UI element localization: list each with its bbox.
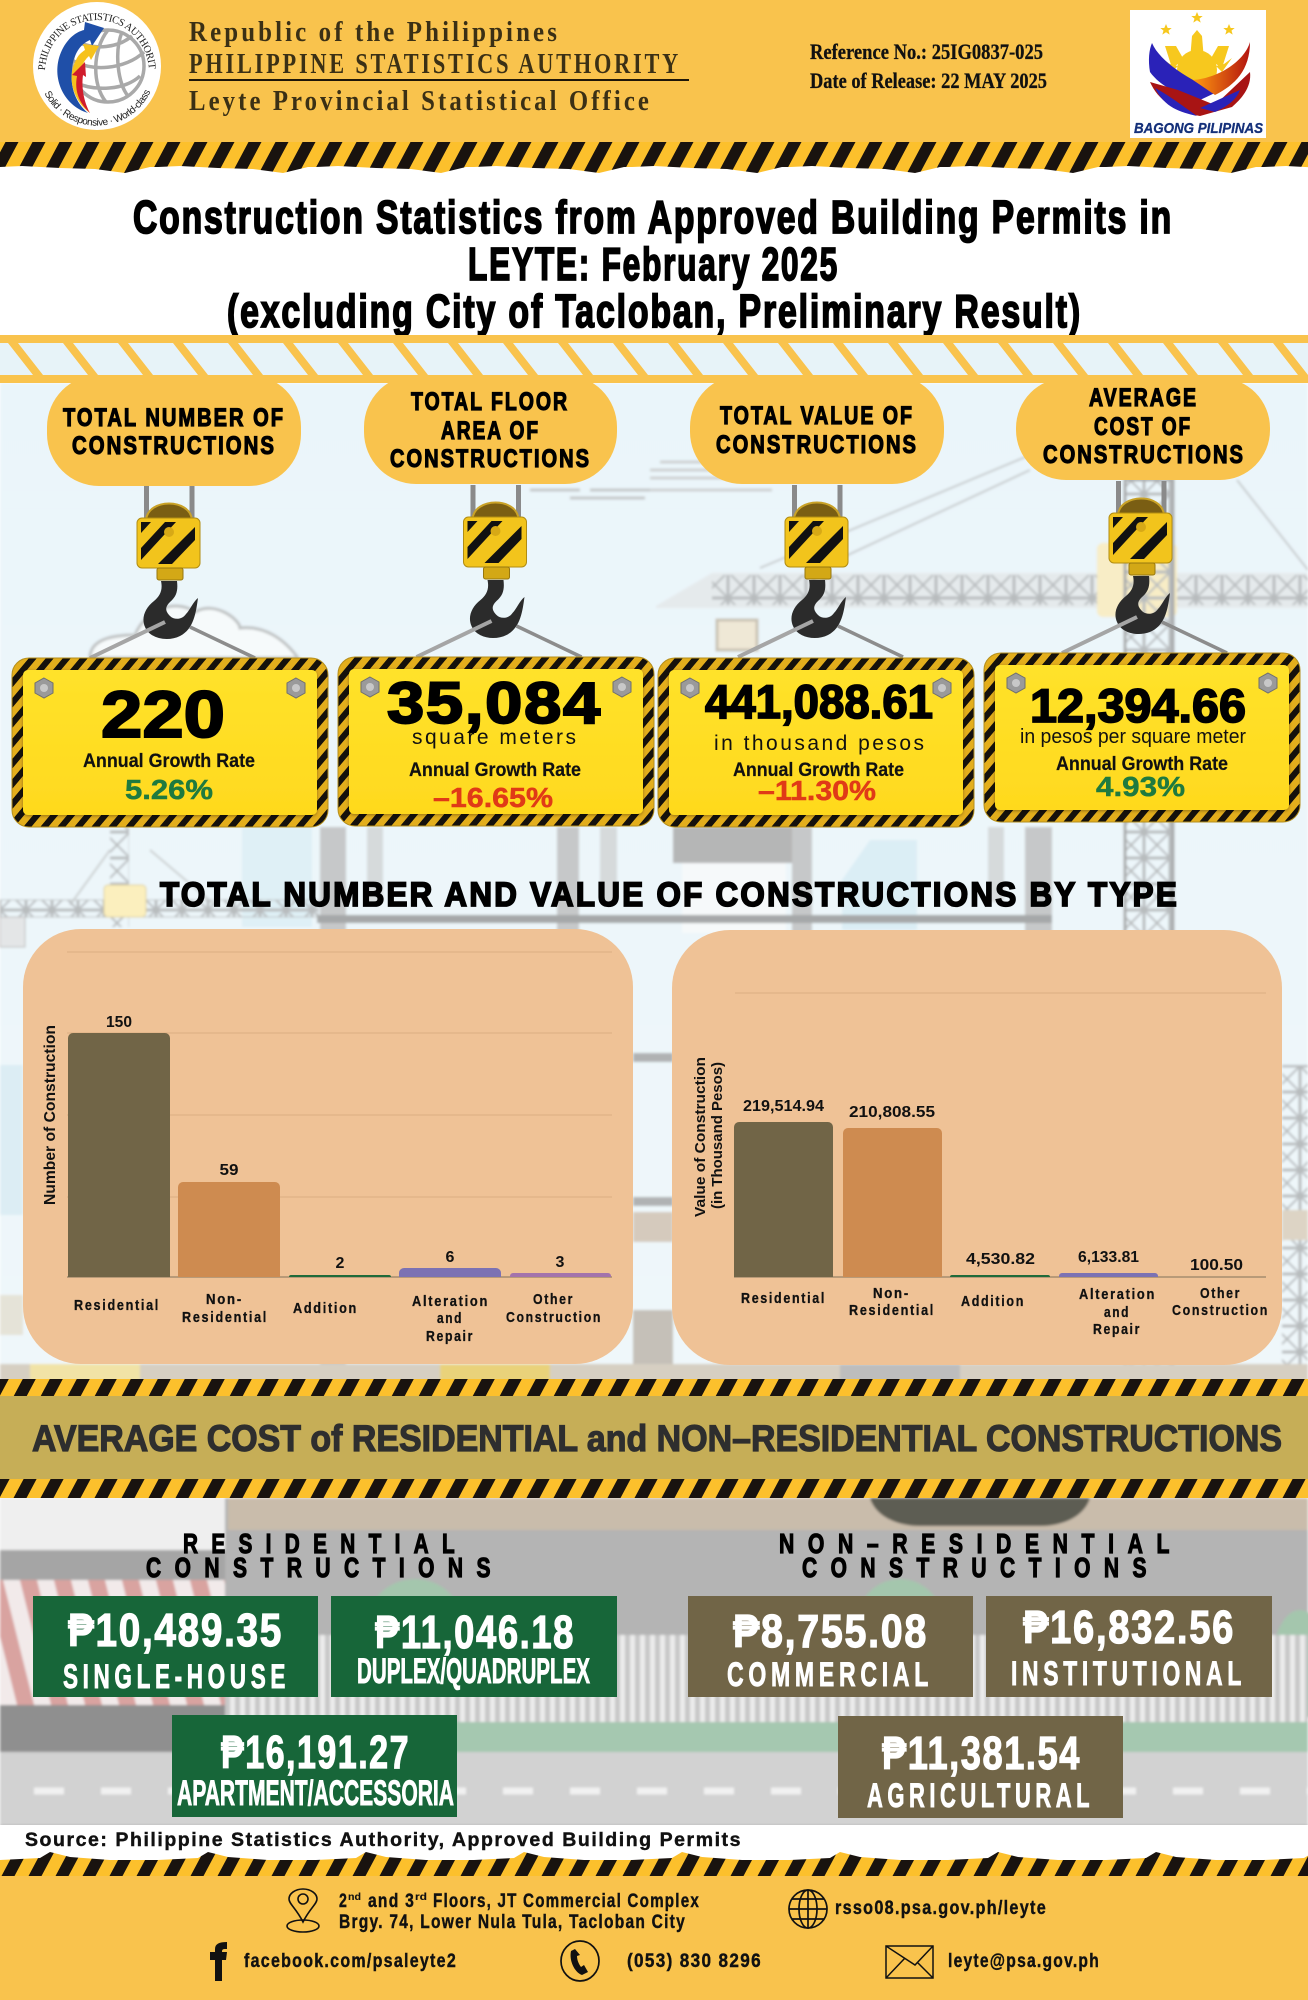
title band: LEYTE: February 2025	[468, 238, 839, 290]
card: apartment/accessoria: ₱16,191.27	[221, 1726, 410, 1778]
category labels: Non-	[873, 1285, 910, 1302]
heading: residential constructions	[146, 1528, 504, 1583]
category labels: Other	[1200, 1285, 1241, 1302]
bars	[734, 1122, 1158, 1277]
address	[339, 1891, 700, 1933]
pill labels: TOTAL NUMBER OF	[63, 404, 285, 432]
pill labels	[63, 384, 1245, 473]
category labels	[741, 1285, 1269, 1338]
pill labels: AREA OF	[441, 417, 540, 445]
agency name	[189, 17, 689, 117]
card: single-house: ₱10,489.35	[68, 1604, 283, 1656]
sign: total number of constructions: 5.26%	[125, 774, 213, 805]
pill labels: TOTAL FLOOR	[411, 388, 569, 416]
card: commercial: ₱8,755.08	[733, 1605, 928, 1657]
value labels: 6,133.81	[1078, 1249, 1139, 1266]
category labels: Addition	[961, 1293, 1025, 1310]
category labels: Residential	[741, 1290, 826, 1307]
value labels: 219,514.94	[743, 1098, 824, 1115]
category labels: Other	[533, 1291, 574, 1308]
axis title: Value of Construction	[692, 1057, 709, 1217]
footer contact band	[0, 1876, 1308, 2000]
card: single-house: SINGLE-HOUSE	[63, 1658, 290, 1696]
header band	[0, 0, 1308, 142]
reference number and release date: Date of Release: 22 MAY 2025	[810, 68, 1047, 93]
agency name: Republic of the Philippines	[189, 17, 560, 48]
heading: non-residential constructions: NON–RESIDENTIAL	[779, 1528, 1183, 1559]
hazard stripe: bottom torn	[0, 1851, 1308, 1877]
category labels: Construction	[506, 1309, 602, 1326]
heading: non-residential constructions	[779, 1528, 1183, 1583]
source note	[0, 1825, 1308, 1855]
panel: number of construction bar chart	[23, 929, 633, 1364]
hazard stripe: top torn	[0, 142, 1308, 176]
category labels: Residential	[182, 1309, 268, 1326]
sign: total value: in thousand pesos	[714, 732, 924, 755]
pill labels: TOTAL VALUE OF	[720, 402, 914, 430]
value labels: 4,530.82	[966, 1251, 1035, 1268]
category labels	[74, 1291, 602, 1345]
value labels: 6	[446, 1249, 455, 1266]
address: Brgy. 74, Lower Nula Tula, Tacloban City	[339, 1912, 686, 1933]
category labels: and	[1104, 1304, 1130, 1321]
sign: total number of constructions: Annual Growth Rate	[83, 750, 255, 772]
category labels: Residential	[849, 1302, 935, 1319]
sign: average cost: Annual Growth Rate	[1056, 753, 1228, 775]
sign: total number of constructions: 220	[101, 677, 225, 751]
card: duplex/quadruplex: DUPLEX/QUADRUPLEX	[357, 1652, 590, 1691]
card: commercial	[688, 1596, 973, 1697]
card: single-house	[33, 1596, 318, 1697]
axis title: Number of Construction	[42, 1025, 59, 1205]
source note: Source: Philippine Statistics Authority, Approved Building Permits	[25, 1830, 742, 1851]
pills: metric titles	[47, 375, 1270, 486]
sign: total floor area: square meters	[412, 726, 576, 749]
category labels: and	[437, 1310, 463, 1327]
striped banner	[0, 335, 1308, 383]
background: construction scene	[0, 383, 1308, 1400]
category labels: Construction	[1172, 1302, 1269, 1319]
sign: total floor area	[338, 657, 654, 826]
axis title: (in Thousand Pesos)	[709, 1062, 726, 1209]
category labels: Repair	[426, 1328, 474, 1345]
banner: average cost heading	[0, 1379, 1308, 1498]
category labels: Repair	[1093, 1321, 1141, 1338]
sign: total number of constructions	[12, 658, 328, 827]
icon: globe	[789, 1890, 827, 1928]
card: institutional	[986, 1596, 1272, 1697]
icon: crane hooks	[90, 481, 1227, 658]
Bagong Pilipinas logo: BAGONG PILIPINAS	[1134, 120, 1263, 137]
bars	[68, 1033, 611, 1277]
address: Floors, JT Commercial Complex	[433, 1891, 700, 1912]
value labels: 210,808.55	[849, 1104, 935, 1121]
sign: total value: –11.30%	[758, 775, 876, 806]
heading: residential constructions: RESIDENTIAL	[183, 1528, 468, 1559]
category labels: Alteration	[1079, 1286, 1156, 1303]
card: duplex/quadruplex: ₱11,046.18	[375, 1606, 575, 1658]
pill labels: CONSTRUCTIONS	[716, 431, 918, 459]
PSA logo	[33, 2, 161, 130]
background: street scene	[0, 1498, 1308, 1828]
card: apartment/accessoria	[172, 1715, 457, 1817]
address: and 3	[368, 1891, 415, 1912]
PSA logo: Solid · Responsive · World-class	[45, 90, 150, 126]
reference number and release date: Reference No.: 25IG0837-025	[810, 39, 1043, 64]
sign: average cost	[984, 653, 1300, 822]
section heading: TOTAL NUMBER AND VALUE OF CONSTRUCTIONS BY TYPE	[160, 876, 1179, 914]
heading: residential constructions: CONSTRUCTIONS	[146, 1552, 504, 1583]
icon: map pin	[287, 1889, 319, 1932]
sign: average cost: in pesos per square meter	[1020, 726, 1246, 748]
sign: total floor area: Annual Growth Rate	[409, 759, 581, 781]
card: agricultural	[838, 1716, 1123, 1818]
address: rd	[415, 1892, 427, 1903]
sign: average cost: 4.93%	[1096, 771, 1185, 802]
category labels: Addition	[293, 1300, 358, 1317]
category labels: Non-	[206, 1291, 243, 1308]
panel: value of construction bar chart	[672, 930, 1282, 1365]
phone number: (053) 830 8296	[627, 1951, 762, 1972]
value labels: 150	[106, 1014, 132, 1031]
address: 2	[339, 1891, 348, 1912]
value labels: 2	[336, 1255, 345, 1272]
facebook handle: facebook.com/psaleyte2	[244, 1951, 457, 1972]
sign: average cost: 12,394.66	[1030, 679, 1246, 732]
address: nd	[348, 1892, 361, 1903]
card: institutional: ₱16,832.56	[1023, 1601, 1235, 1653]
title band	[0, 175, 1308, 337]
icon: phone	[561, 1941, 599, 1981]
axis title	[692, 1057, 726, 1217]
pill labels: CONSTRUCTIONS	[1043, 441, 1245, 469]
sign: total floor area: 35,084	[387, 671, 602, 736]
value labels	[106, 1014, 565, 1272]
sign: total value: 441,088.61	[705, 675, 933, 728]
value labels: 100.50	[1190, 1257, 1243, 1274]
pill labels: CONSTRUCTIONS	[72, 432, 276, 460]
email: leyte@psa.gov.ph	[948, 1951, 1100, 1972]
card: duplex/quadruplex	[331, 1596, 617, 1697]
card: apartment/accessoria: APARTMENT/ACCESSORIA	[177, 1774, 454, 1813]
icon: envelope	[886, 1946, 933, 1978]
agency name: PHILIPPINE STATISTICS AUTHORITY	[189, 49, 681, 80]
card: commercial: COMMERCIAL	[727, 1656, 933, 1694]
pill labels: CONSTRUCTIONS	[390, 445, 591, 473]
Bagong Pilipinas logo	[1130, 10, 1266, 138]
sign: total value: Annual Growth Rate	[733, 759, 904, 781]
value labels: 3	[556, 1254, 565, 1271]
category labels: Alteration	[412, 1293, 489, 1310]
website: rsso08.psa.gov.ph/leyte	[835, 1898, 1047, 1919]
card: agricultural: ₱11,381.54	[882, 1727, 1081, 1779]
sign: total value	[658, 658, 974, 827]
value labels: 59	[220, 1162, 239, 1179]
card: agricultural: AGRICULTURAL	[867, 1777, 1094, 1815]
reference number and release date	[810, 39, 1047, 93]
category labels: Residential	[74, 1297, 160, 1314]
icon: facebook	[210, 1942, 227, 1981]
value labels	[743, 1098, 1243, 1274]
pill labels: AVERAGE	[1089, 384, 1198, 412]
pill labels: COST OF	[1094, 413, 1192, 441]
heading: non-residential constructions: CONSTRUCTIONS	[802, 1552, 1160, 1583]
agency name: Leyte Provincial Statistical Office	[189, 86, 652, 117]
sign: total floor area: –16.65%	[433, 782, 553, 813]
